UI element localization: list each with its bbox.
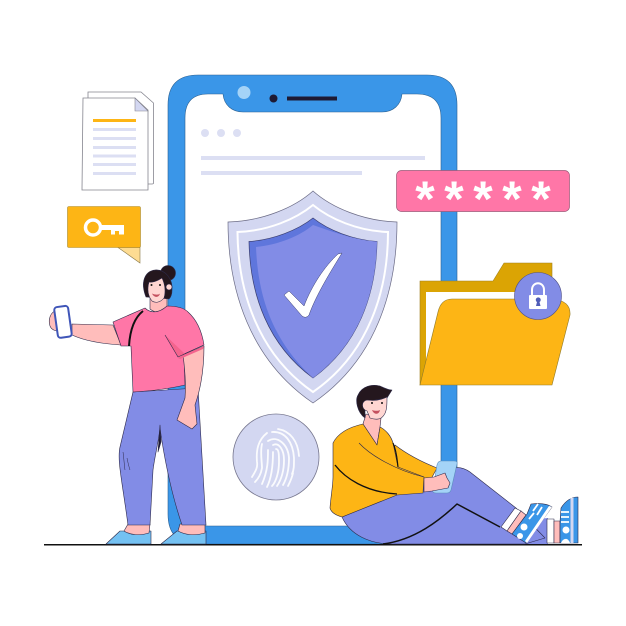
shirt (113, 306, 204, 392)
folder with lock (420, 263, 570, 385)
woman (49, 266, 206, 544)
hair bun (160, 266, 176, 280)
password field: * (531, 171, 551, 227)
rear shoe (560, 497, 578, 543)
trousers (342, 468, 545, 544)
face (148, 278, 165, 302)
hair back (143, 270, 172, 299)
password field: * (502, 171, 522, 227)
held phone (54, 306, 72, 338)
extended arm (72, 324, 121, 345)
left shoe (106, 531, 151, 544)
password field (396, 170, 570, 227)
socks (501, 508, 521, 531)
phone (168, 75, 457, 544)
password field: * (473, 171, 493, 227)
front shoe (512, 504, 552, 543)
ear (166, 284, 172, 290)
far sleeve (390, 445, 437, 492)
password field: * (415, 171, 435, 227)
hand-held phone (433, 461, 457, 493)
documents (82, 92, 154, 190)
fingerprint (233, 414, 319, 500)
shield with check mark (228, 191, 397, 403)
back leg (500, 518, 548, 544)
password field: * (444, 171, 464, 227)
neck (363, 414, 381, 445)
hand (424, 473, 450, 492)
trousers (119, 388, 206, 525)
key speech bubble (68, 206, 140, 263)
neck (150, 296, 167, 312)
sweater (330, 424, 424, 517)
ground line (44, 544, 582, 546)
right shoe (161, 531, 206, 544)
hair (357, 385, 392, 418)
hand (49, 310, 62, 331)
arm (177, 346, 204, 429)
man (330, 385, 578, 544)
icon: key (86, 220, 124, 235)
face (362, 397, 387, 419)
